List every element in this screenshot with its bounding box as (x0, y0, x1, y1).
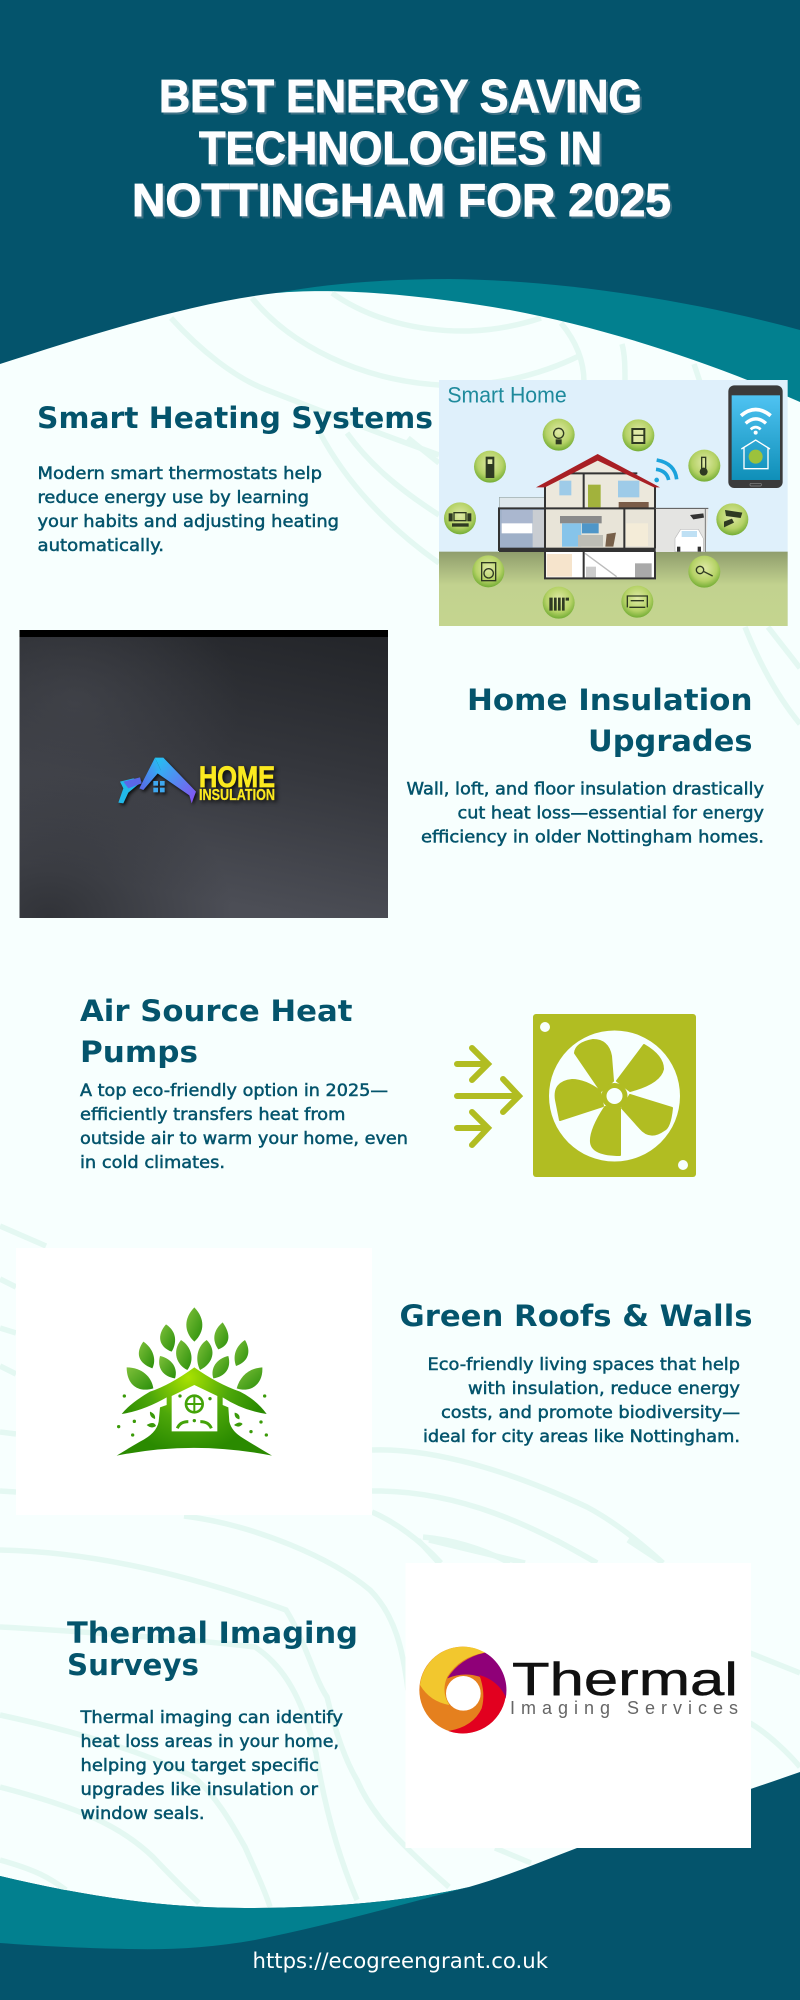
text block: thermal imaging description: Thermal imaging can identify (79, 1708, 343, 1728)
text block: green roofs description (423, 1355, 740, 1447)
text block: thermal imaging description: upgrades like insulation or (80, 1780, 318, 1800)
text block: thermal imaging description: heat loss areas in your home, (80, 1732, 339, 1752)
image: smart home illustration (439, 380, 788, 626)
text block: smart heating description (38, 464, 339, 556)
heading: thermal imaging surveys: Surveys (67, 1648, 199, 1682)
footer url: https://ecogreengrant.co.uk (252, 1949, 549, 1973)
title: TECHNOLOGIES IN (199, 122, 602, 174)
panel: thermal imaging surveys (67, 1563, 751, 1848)
heading: air source heat pumps: Pumps (80, 1035, 198, 1069)
heading: thermal imaging surveys: Thermal Imaging (67, 1616, 358, 1650)
image: home insulation logo on dark background: INSULATION (199, 787, 275, 804)
panel: air source heat pumps (80, 994, 696, 1177)
heading: green roofs and walls: Green Roofs & Walls (400, 1299, 752, 1333)
heading: home insulation upgrades (467, 683, 752, 758)
icon: thermal imaging services logo: Thermal (512, 1653, 738, 1705)
title (132, 70, 671, 226)
icon: thermal imaging services logo: Imaging Services (510, 1698, 738, 1718)
wifi (656, 460, 677, 480)
icon: thermal imaging services logo (419, 1647, 738, 1733)
icon: airflow arrows (457, 1048, 519, 1145)
text block: green roofs description: ideal for city areas like Nottingham. (423, 1427, 740, 1447)
text block: thermal imaging description (79, 1708, 343, 1824)
text block: heat pump description: efficiently transfers heat from (80, 1105, 346, 1125)
top teal wave (276, 279, 800, 500)
panel: green roofs and walls (16, 1248, 752, 1515)
heading: thermal imaging surveys (67, 1616, 358, 1682)
heading: air source heat pumps (80, 994, 353, 1069)
image: smart home illustration: Smart Home (447, 383, 567, 408)
icon: green house tree logo (117, 1307, 272, 1456)
icon: fan unit (533, 1014, 696, 1177)
text block: home insulation description: cut heat loss—essential for energy (458, 804, 764, 824)
text block: home insulation description: Wall, loft, and floor insulation drastically (406, 780, 764, 800)
text block: smart heating description: reduce energy use by learning (38, 488, 309, 508)
text block: heat pump description: outside air to warm your home, even (80, 1129, 408, 1149)
panel: smart heating systems (37, 380, 788, 626)
heading: air source heat pumps: Air Source Heat (80, 994, 353, 1028)
text block: thermal imaging description: helping you target specific (80, 1756, 319, 1776)
text block: smart heating description: automatically. (38, 536, 164, 556)
car (675, 529, 703, 552)
image panel: white backdrop (406, 1563, 751, 1848)
text block: green roofs description: costs, and promote biodiversity— (441, 1403, 740, 1423)
text block: heat pump description: in cold climates. (80, 1153, 225, 1173)
text block: home insulation description (406, 780, 764, 848)
title: BEST ENERGY SAVING (159, 70, 642, 122)
text block: home insulation description: efficiency in older Nottingham homes. (421, 828, 764, 848)
icon circles (444, 419, 748, 619)
text block: thermal imaging description: window seals. (80, 1804, 204, 1824)
heading: home insulation upgrades: Upgrades (588, 724, 752, 758)
title: NOTTINGHAM FOR 2025 (132, 174, 671, 226)
heading: smart heating systems: Smart Heating Systems (37, 401, 433, 435)
text block: heat pump description (80, 1081, 408, 1173)
text block: smart heating description: your habits and adjusting heating (38, 512, 339, 532)
image: home insulation logo on dark background: HOME (199, 761, 275, 794)
panel: home insulation upgrades (20, 630, 764, 918)
image: home insulation logo on dark background (20, 630, 388, 918)
bottom teal wave (0, 1876, 469, 1949)
text block: heat pump description: A top eco-friendly option in 2025— (80, 1081, 388, 1101)
phone (728, 385, 783, 488)
text block: green roofs description: Eco-friendly living spaces that help (428, 1355, 740, 1375)
heading: home insulation upgrades: Home Insulation (467, 683, 752, 717)
text block: smart heating description: Modern smart thermostats help (38, 464, 322, 484)
house (499, 497, 544, 508)
text block: green roofs description: with insulation, reduce energy (468, 1379, 740, 1399)
image panel: white backdrop (16, 1248, 372, 1515)
